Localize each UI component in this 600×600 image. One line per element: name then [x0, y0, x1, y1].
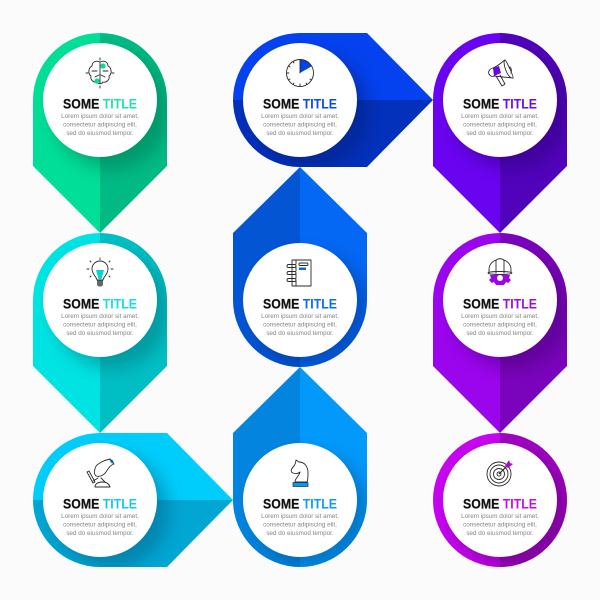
- text block: Lorem ipsum dolor sit amet,: [261, 113, 339, 120]
- text block: [261, 313, 339, 337]
- text block: Lorem ipsum dolor sit amet,: [461, 113, 539, 120]
- text block: Lorem ipsum dolor sit amet,: [61, 113, 139, 120]
- icon: brain: [86, 58, 114, 88]
- text block: sed do eiusmod tempor.: [466, 530, 534, 537]
- text block: sed do eiusmod tempor.: [66, 530, 134, 537]
- heading: SOME TITLE: [463, 96, 537, 112]
- text block: sed do eiusmod tempor.: [466, 130, 534, 137]
- panel: violet pin step 3: [433, 33, 569, 233]
- panel: magenta circle step 9: [433, 433, 569, 569]
- text block: consectetur adipiscing elit,: [463, 122, 537, 128]
- icon: chess knight: [291, 460, 308, 486]
- text block: [461, 113, 539, 137]
- text block: sed do eiusmod tempor.: [466, 330, 534, 337]
- text block: consectetur adipiscing elit,: [63, 322, 137, 328]
- heading: SOME TITLE: [63, 96, 137, 112]
- icon: helmet and gear: [488, 259, 512, 285]
- panel: azure pin step 8 pointing up: [233, 367, 369, 569]
- heading: SOME TITLE: [263, 296, 337, 312]
- panel: cyan pin step 4: [33, 233, 169, 433]
- text block: consectetur adipiscing elit,: [263, 122, 337, 128]
- heading: SOME TITLE: [63, 496, 137, 512]
- icon: microscope: [87, 459, 114, 487]
- panel: sky blue pin step 7 pointing right: [33, 433, 233, 569]
- text block: sed do eiusmod tempor.: [66, 330, 134, 337]
- panel: purple pin step 6: [433, 233, 569, 433]
- heading: SOME TITLE: [463, 496, 537, 512]
- icon: notebook: [287, 260, 311, 286]
- text block: consectetur adipiscing elit,: [63, 122, 137, 128]
- heading: SOME TITLE: [263, 496, 337, 512]
- icon: megaphone: [489, 60, 513, 86]
- text block: consectetur adipiscing elit,: [463, 322, 537, 328]
- text block: consectetur adipiscing elit,: [63, 522, 137, 528]
- text block: [461, 313, 539, 337]
- text block: sed do eiusmod tempor.: [266, 130, 334, 137]
- heading: SOME TITLE: [63, 296, 137, 312]
- text block: consectetur adipiscing elit,: [263, 322, 337, 328]
- text block: Lorem ipsum dolor sit amet,: [461, 513, 539, 520]
- text block: Lorem ipsum dolor sit amet,: [61, 313, 139, 320]
- text block: sed do eiusmod tempor.: [66, 130, 134, 137]
- icon: light bulb: [87, 258, 113, 286]
- text block: Lorem ipsum dolor sit amet,: [261, 513, 339, 520]
- text block: Lorem ipsum dolor sit amet,: [261, 313, 339, 320]
- text block: [61, 113, 139, 137]
- text block: consectetur adipiscing elit,: [263, 522, 337, 528]
- text block: [61, 313, 139, 337]
- text block: sed do eiusmod tempor.: [266, 330, 334, 337]
- panel: blue pin step 2 pointing right: [233, 33, 433, 169]
- text block: Lorem ipsum dolor sit amet,: [461, 313, 539, 320]
- text block: [461, 513, 539, 537]
- text block: Lorem ipsum dolor sit amet,: [61, 513, 139, 520]
- panel: blue pin step 5 pointing up: [233, 167, 369, 369]
- text block: [261, 513, 339, 537]
- icon: target with dart: [487, 460, 513, 486]
- text block: [261, 113, 339, 137]
- text block: [61, 513, 139, 537]
- panel: green pin step 1: [33, 33, 169, 233]
- heading: SOME TITLE: [463, 296, 537, 312]
- text block: consectetur adipiscing elit,: [463, 522, 537, 528]
- icon: clock: [286, 60, 314, 86]
- text block: sed do eiusmod tempor.: [266, 530, 334, 537]
- heading: SOME TITLE: [263, 96, 337, 112]
